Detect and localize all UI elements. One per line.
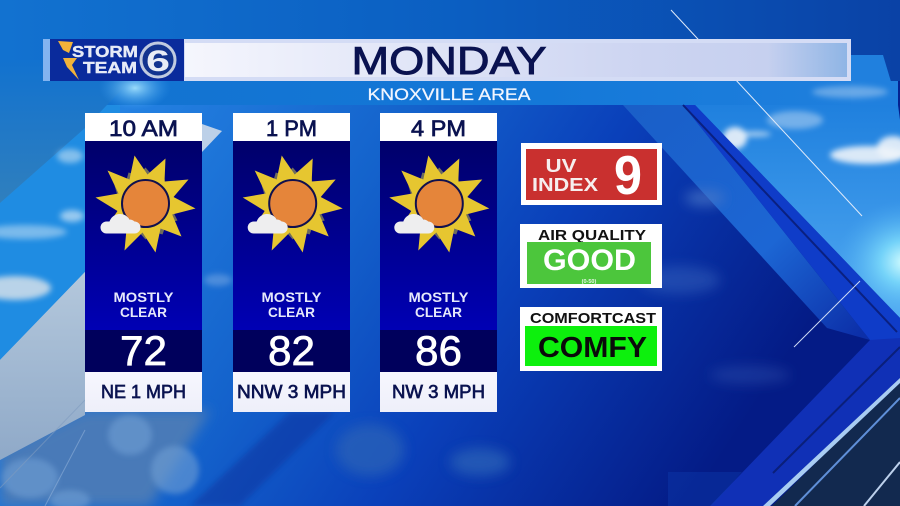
right sky [695,105,900,318]
panel: air quality [520,224,662,288]
icon: sun with cloud [243,156,343,252]
panel: comfortcast: COMFY [538,332,647,364]
wind: NW 3 MPH [392,382,485,402]
logo: Storm Team 6: TEAM [83,60,137,77]
condition: MOSTLY [114,289,174,305]
panel: comfortcast [520,307,662,371]
panel: UV index: INDEX [532,174,599,195]
left sky [0,105,120,405]
time: 10 AM: 10 AM [109,116,178,141]
panel: 4 PM forecast: CLEAR [415,304,462,320]
condition: MOSTLY [262,289,322,305]
wind: NE 1 MPH [101,382,186,402]
temperature: 72 [120,327,167,374]
temperature: 82 [268,327,315,374]
panel: 4 PM forecast [380,113,497,412]
wind: NNW 3 MPH [237,382,346,402]
panel: UV index: 9 [614,144,642,206]
logo: Storm Team 6 [50,39,184,81]
panel: UV index: UV [546,156,576,176]
icon: sun with cloud [389,156,489,252]
time: 4 PM: 4 PM [411,116,466,141]
temperature: 86 [415,327,462,374]
panel: air quality: (0-50) [582,279,597,285]
logo: Storm Team 6: 6 [146,45,170,78]
condition: MOSTLY [408,289,469,305]
panel: 1 PM forecast [233,113,350,412]
panel: air quality: GOOD [543,244,636,277]
panel: UV index [521,143,662,206]
panel: comfortcast: COMFORTCAST [530,310,656,327]
icon: sun with cloud [96,156,196,252]
logo: Storm Team 6: STORM [72,44,138,61]
bottom clouds [2,415,199,506]
title: MONDAY [352,40,546,83]
header bar [43,39,851,83]
panel: 10 AM forecast [85,113,202,412]
panel: air quality: AIR QUALITY [538,227,646,244]
panel: 10 AM forecast: CLEAR [120,304,167,320]
subtitle: KNOXVILLE AREA [368,85,531,104]
panel: 1 PM forecast: CLEAR [268,304,315,320]
time: 1 PM: 1 PM [266,116,317,141]
chevron bands [623,105,870,340]
